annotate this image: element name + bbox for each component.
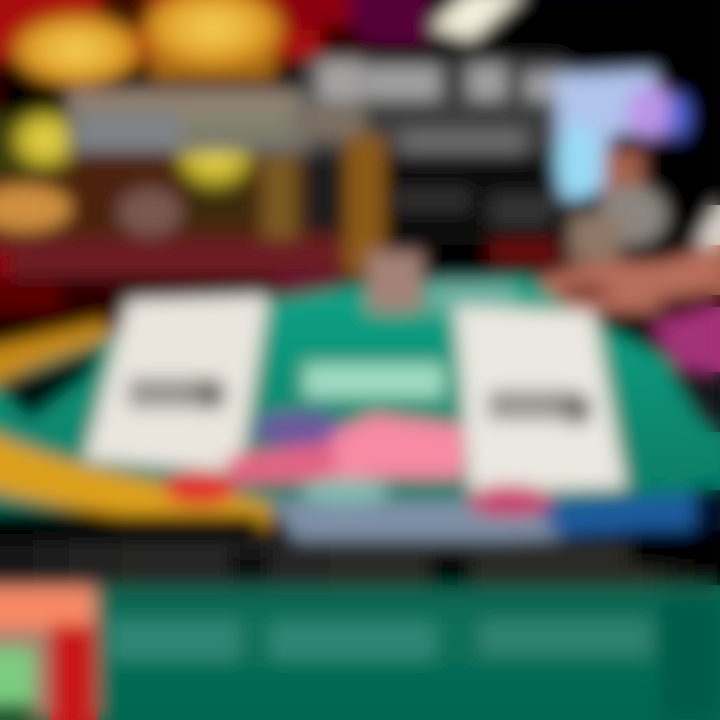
card left text [128,378,216,408]
lower green panel [0,585,720,720]
headline line 1 left [318,60,363,102]
mauve blur [118,188,182,236]
blue glare [667,94,689,138]
card right dot [562,393,592,425]
headline line 1 word [468,64,506,100]
pink chip band [330,414,464,478]
dark vertical slot [305,150,337,230]
gold lamp left [13,15,141,85]
white highlight at top [430,0,525,40]
card left dot [196,378,226,410]
card left body [84,295,268,472]
red chip right [468,485,552,517]
pale teal band [301,478,389,504]
lower caption in panel [490,195,552,225]
right edge shade [660,600,720,720]
lower caption two [270,622,435,660]
central green label [304,364,444,398]
purple chip band [252,411,344,447]
box green face [0,648,34,704]
gold lamp halo [150,40,275,80]
iridescent highlight [555,70,689,200]
headline line 1 word [365,66,440,100]
arm shadow [650,290,720,325]
light blue glare [555,70,660,200]
card right text [488,390,576,420]
headline sub [295,105,365,140]
dark corner right [668,368,720,432]
poker table [0,278,720,548]
headline left backing [68,90,308,152]
yellow coin left [11,110,79,170]
dark table edge [0,515,720,588]
black wedge left [0,345,105,420]
pink chip band left [226,442,335,484]
red chip left [164,471,236,505]
yellow coin right [175,121,255,189]
headline line 2 [80,115,180,150]
gold column right [345,135,385,275]
headline line 2 warm [68,90,293,110]
chip stack top [368,252,422,312]
blurred headline [68,58,575,225]
purple glare [626,86,674,138]
felt [0,278,720,510]
headline line 3 [400,130,525,154]
lower caption in panel [395,190,470,210]
orange coin low [0,185,71,231]
lower hand [535,245,720,312]
hand and arm [535,150,720,325]
pale felt top [430,280,515,314]
box body [0,585,98,720]
olive halo left [0,115,60,175]
grey blue apron [270,500,560,548]
gold column left [262,155,297,240]
olive patch centre [185,180,255,225]
magenta cloth [650,305,720,372]
hand shadow [559,283,611,301]
box green shadow [0,704,34,720]
palm grey [597,185,667,245]
card right body [455,306,626,492]
blue rail [530,490,720,535]
headline line 1 word [525,72,575,100]
sleeve [695,200,720,250]
gold coins and lamps [0,0,283,236]
cyan glare [556,124,600,200]
finger [605,150,643,205]
lower caption one [110,620,240,660]
wrist tan [570,215,620,260]
gold lamp right [143,0,283,68]
card left [84,295,268,472]
lower caption three [480,620,650,656]
box red side [50,625,96,720]
headline backing [300,58,565,155]
upper gold rail [0,320,112,392]
headline line 2 mid [180,112,290,134]
box lid [0,588,92,630]
dark rail end [695,488,720,532]
red velvet band [0,238,360,323]
card right [455,306,626,492]
dark red stripe right [490,240,560,265]
red and green box [0,585,98,720]
lower gold rail [0,428,270,528]
dark central panel [337,150,565,245]
